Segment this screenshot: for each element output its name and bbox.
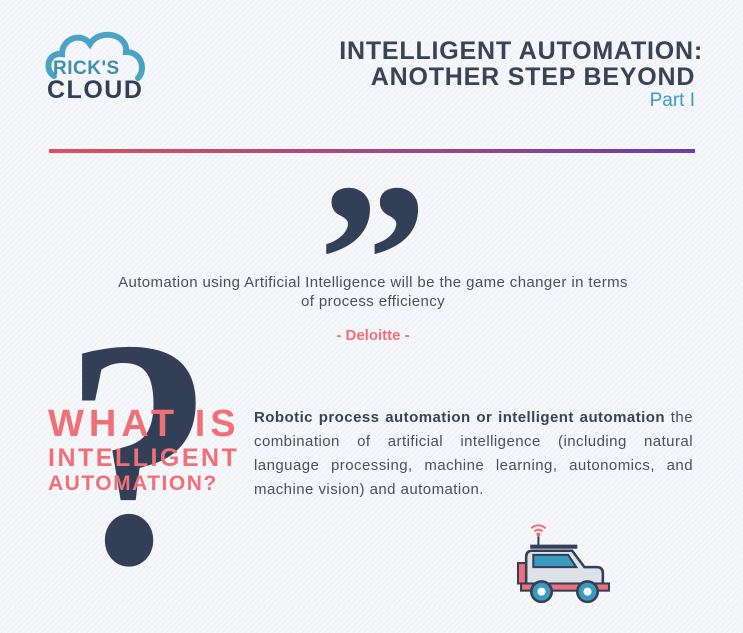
title: Part I	[650, 90, 695, 111]
definition text: Robotic process automation or intelligent automation the combination of artificial intelligence (including natural language processing, machine learning, autonomics, and machine vision) and automation.	[254, 409, 693, 498]
icon: connected car	[516, 524, 610, 604]
logo: RICK'S	[53, 58, 120, 79]
icon: quote mark: ”	[318, 138, 428, 382]
icon: cloud	[48, 35, 142, 78]
quote text: Automation using Artificial Intelligence will be the game changer in terms	[118, 274, 628, 291]
heading: what is intelligent automation: WHAT IS	[48, 403, 241, 445]
title: ANOTHER STEP BEYOND	[371, 63, 695, 91]
heading: what is intelligent automation: INTELLIGENT	[48, 444, 239, 472]
logo: CLOUD	[47, 76, 143, 104]
quote source: - Deloitte -	[336, 327, 410, 344]
heading: what is intelligent automation: AUTOMATION?	[48, 472, 218, 495]
icon: question mark: ?	[64, 273, 214, 633]
title: INTELLIGENT AUTOMATION:	[339, 37, 703, 65]
logo	[45, 32, 145, 104]
quote text	[118, 274, 628, 310]
quote text: of process efficiency	[301, 293, 445, 310]
heading: what is intelligent automation	[48, 403, 241, 495]
title	[339, 37, 703, 111]
